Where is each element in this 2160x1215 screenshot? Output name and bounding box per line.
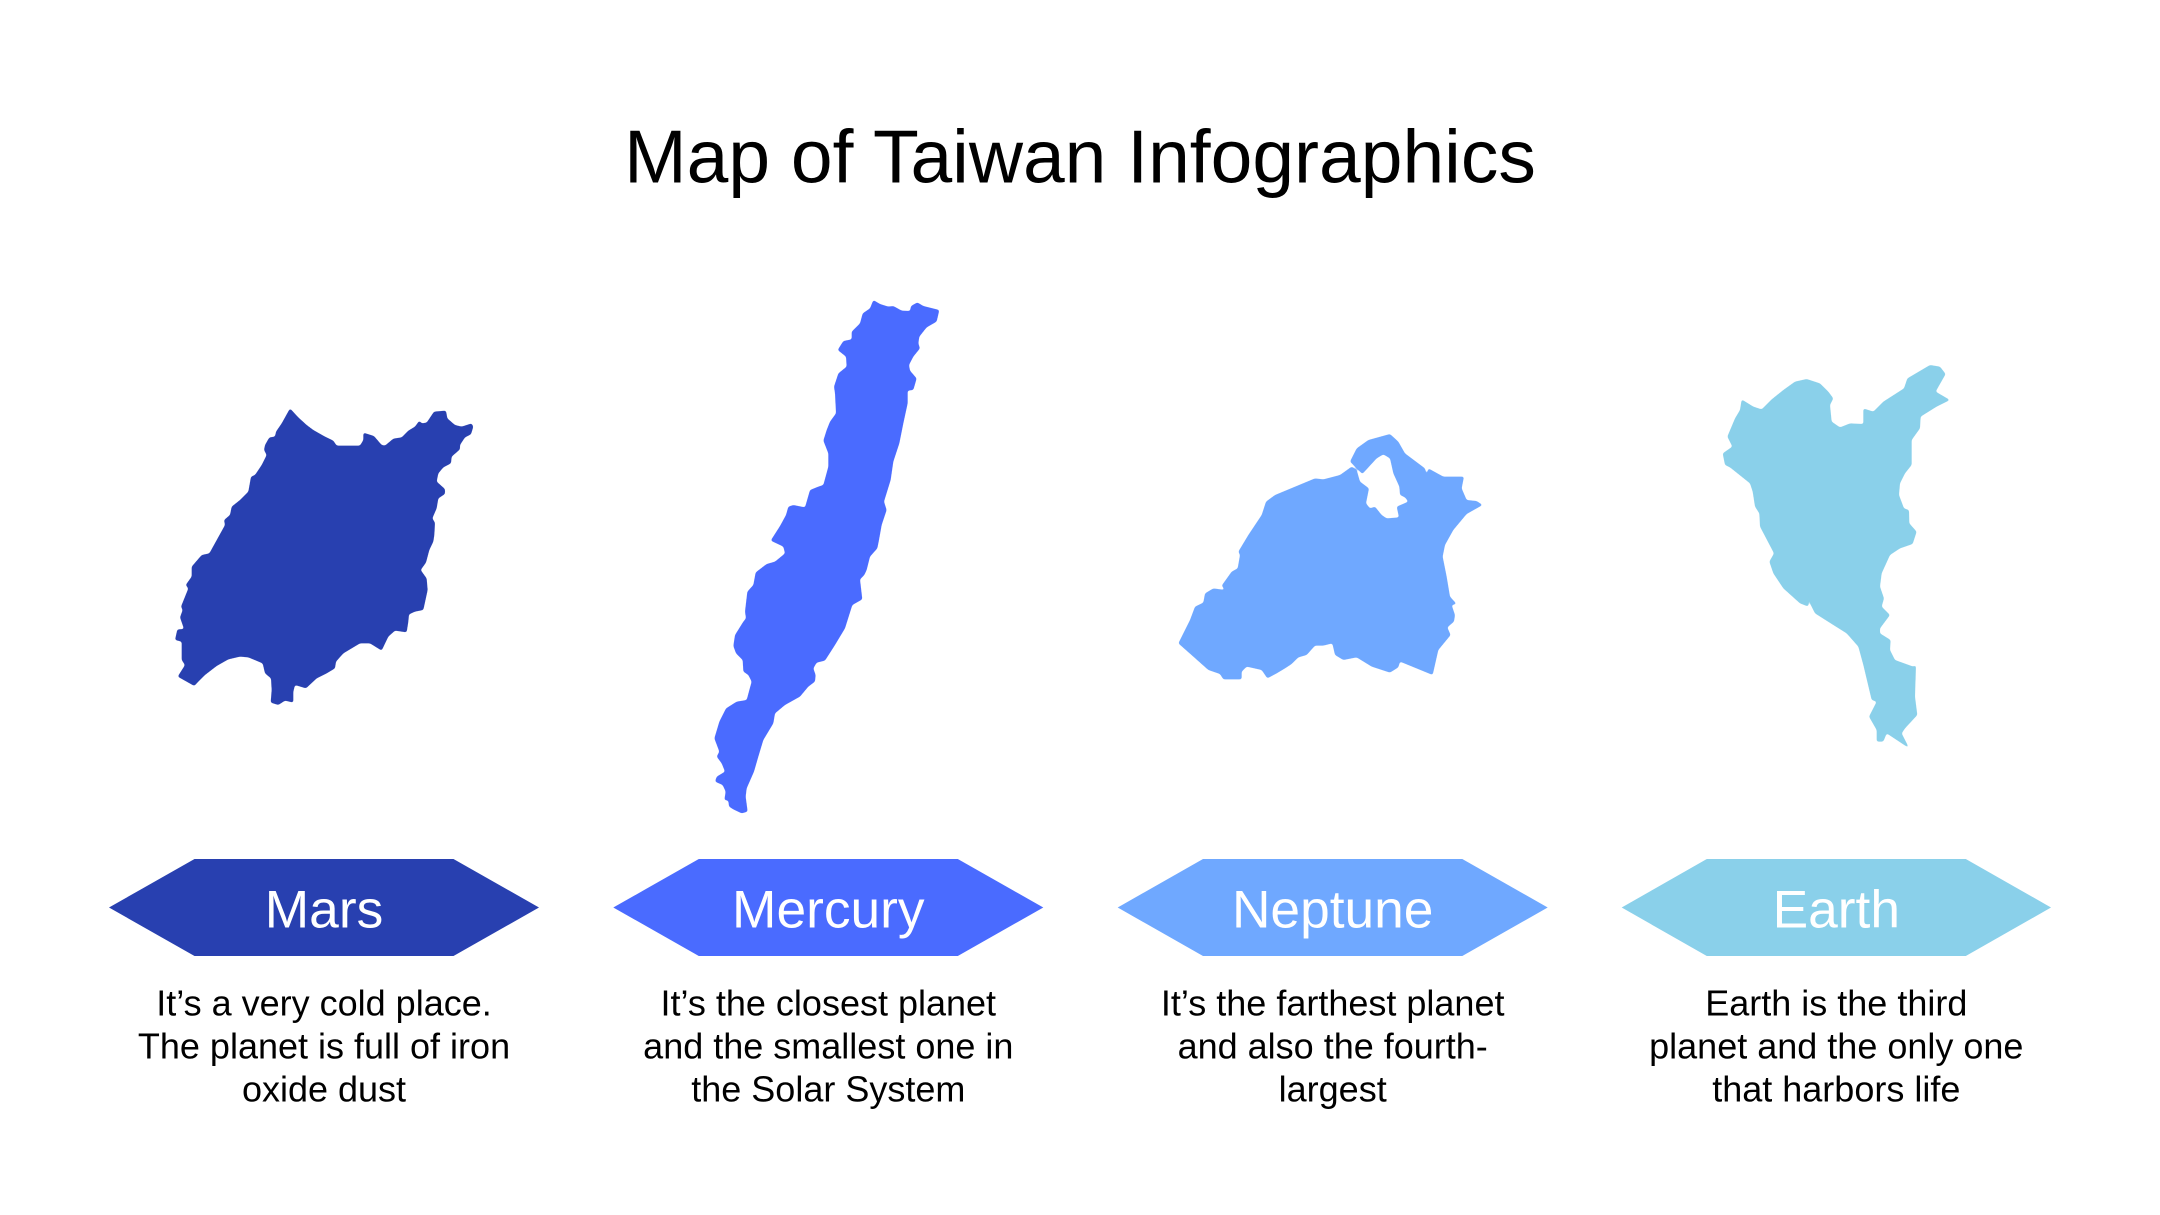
panel: Neptune label and description <box>1118 859 1548 1110</box>
banner: Neptune: Neptune <box>1232 881 1433 940</box>
text: Neptune description: and also the fourth- <box>1178 1026 1488 1067</box>
title: Map of Taiwan Infographics <box>624 114 1536 198</box>
map: Earth county silhouette <box>1723 365 1950 748</box>
banner: Mercury <box>613 859 1043 956</box>
text: Mercury description: It’s the closest planet <box>661 983 996 1024</box>
map: Neptune county silhouette <box>1178 434 1483 679</box>
banner: Mars: Mars <box>265 881 383 940</box>
text: Mars description: The planet is full of iron <box>138 1026 510 1067</box>
text: Earth description: planet and the only one <box>1649 1026 2023 1067</box>
text: Earth description: Earth is the third <box>1705 983 1967 1024</box>
banner: Mars <box>109 859 539 956</box>
text: Mercury description: the Solar System <box>691 1069 965 1110</box>
text: Neptune description: It’s the farthest planet <box>1161 983 1504 1024</box>
map: Mercury county silhouette <box>714 300 939 813</box>
text: Neptune description: largest <box>1279 1069 1387 1110</box>
text: Earth description: that harbors life <box>1712 1069 1960 1110</box>
banner: Mercury: Mercury <box>732 881 925 940</box>
banner: Earth <box>1622 859 2051 956</box>
banner: Neptune <box>1118 859 1548 956</box>
text: Mars description: It’s a very cold place. <box>156 983 492 1024</box>
map: Mars county silhouette <box>175 408 473 705</box>
panel: Earth label and description <box>1622 859 2051 1110</box>
panel: Mercury label and description <box>613 859 1043 1110</box>
text: Mercury description: and the smallest one in <box>643 1026 1013 1067</box>
text: Mars description: oxide dust <box>242 1069 406 1110</box>
banner: Earth: Earth <box>1773 881 1900 940</box>
panel: Mars label and description <box>109 859 539 1110</box>
